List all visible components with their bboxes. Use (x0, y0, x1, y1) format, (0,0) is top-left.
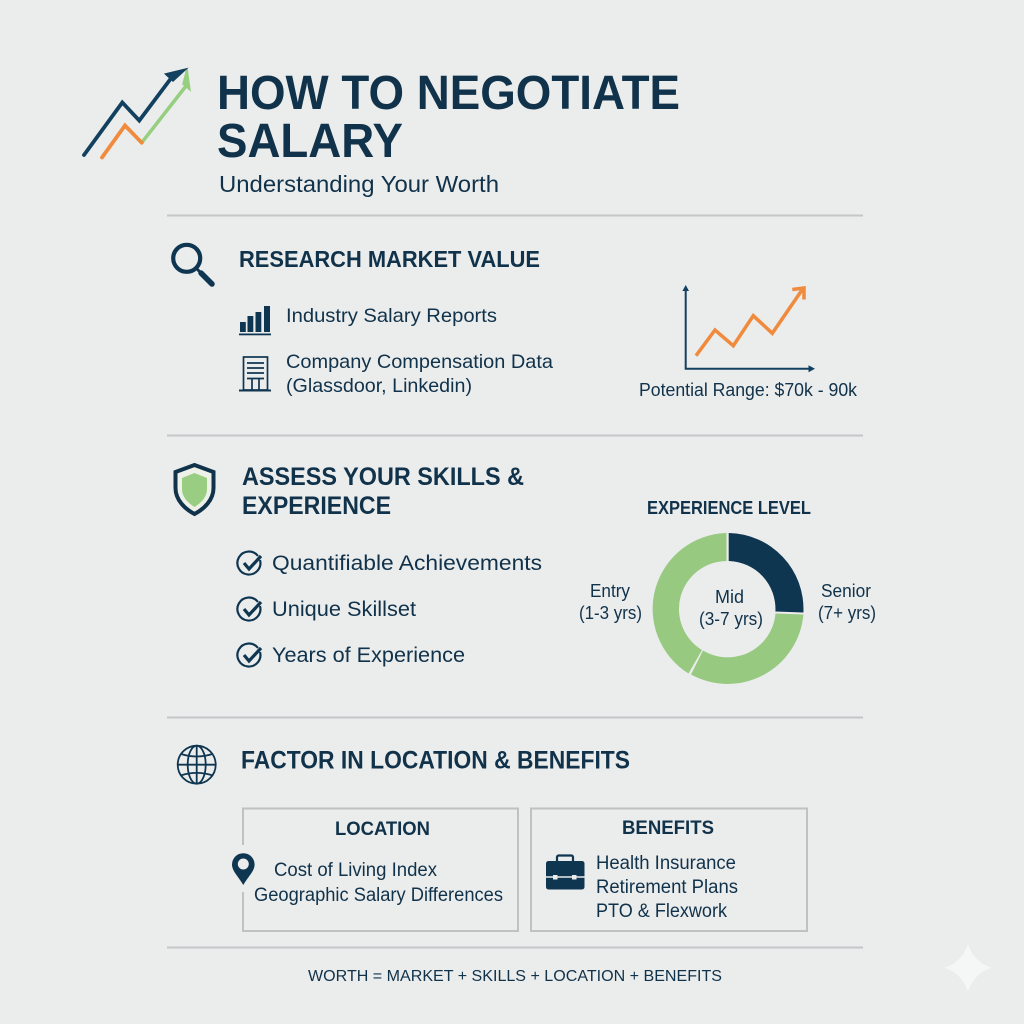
donut label: mid (699, 587, 763, 629)
icon: check (237, 552, 261, 575)
panel: assess skills and experience (176, 463, 876, 684)
donut label: entry (579, 581, 642, 623)
card text: Geographic Salary Differences (254, 885, 503, 906)
icon: sparkle watermark (944, 944, 992, 992)
panel: research market value (173, 245, 858, 400)
card text: PTO & Flexwork (596, 901, 727, 922)
panel: location and benefits (178, 746, 807, 931)
card: benefits (531, 808, 807, 931)
item text: Industry Salary Reports (286, 305, 497, 327)
checklist item: Quantifiable Achievements (272, 552, 542, 575)
icon: briefcase (546, 855, 584, 890)
donut label: entry: Entry (590, 581, 630, 601)
subtitle: Understanding Your Worth (219, 171, 499, 197)
item text: Company Compensation Data (286, 351, 553, 373)
header (84, 67, 680, 197)
donut label: senior: (7+ yrs) (818, 603, 876, 623)
card: location (232, 808, 518, 931)
item text (286, 351, 553, 397)
icon: office building (239, 357, 271, 390)
title: HOW TO NEGOTIATE (217, 67, 680, 120)
donut label: senior (818, 581, 876, 623)
icon: map pin (232, 853, 255, 885)
donut label: mid: Mid (715, 587, 744, 607)
donut label: senior: Senior (821, 581, 871, 601)
icon: check (237, 644, 261, 667)
icon: check (237, 598, 261, 621)
heading: RESEARCH MARKET VALUE (239, 246, 540, 272)
chart caption: Potential Range: $70k - 90k (639, 380, 858, 400)
card text: Cost of Living Index (274, 860, 437, 881)
icon: rising arrows logo (84, 69, 190, 158)
donut label: entry: (1-3 yrs) (579, 603, 642, 623)
line chart (682, 285, 815, 372)
icon: magnifier (173, 245, 212, 284)
card heading: LOCATION (335, 818, 430, 840)
heading: EXPERIENCE (242, 492, 391, 520)
icon: globe (178, 746, 216, 784)
icon: bar chart (239, 306, 271, 335)
card text: Health Insurance (596, 853, 736, 874)
card text (254, 860, 503, 906)
card text (596, 853, 738, 922)
donut chart title: EXPERIENCE LEVEL (647, 498, 811, 518)
donut label: mid: (3-7 yrs) (699, 609, 763, 629)
card heading: BENEFITS (622, 817, 714, 839)
footer formula: WORTH = MARKET + SKILLS + LOCATION + BENEFITS (308, 968, 722, 985)
icon: shield (176, 465, 214, 514)
title (217, 67, 680, 168)
card text: Retirement Plans (596, 877, 738, 898)
checklist item: Years of Experience (272, 644, 465, 667)
heading (242, 463, 524, 520)
donut chart (653, 533, 803, 684)
checklist item: Unique Skillset (272, 598, 416, 621)
heading: FACTOR IN LOCATION & BENEFITS (241, 746, 630, 774)
title: SALARY (217, 115, 403, 168)
heading: ASSESS YOUR SKILLS & (242, 463, 524, 491)
item text: (Glassdoor, Linkedin) (286, 375, 472, 397)
